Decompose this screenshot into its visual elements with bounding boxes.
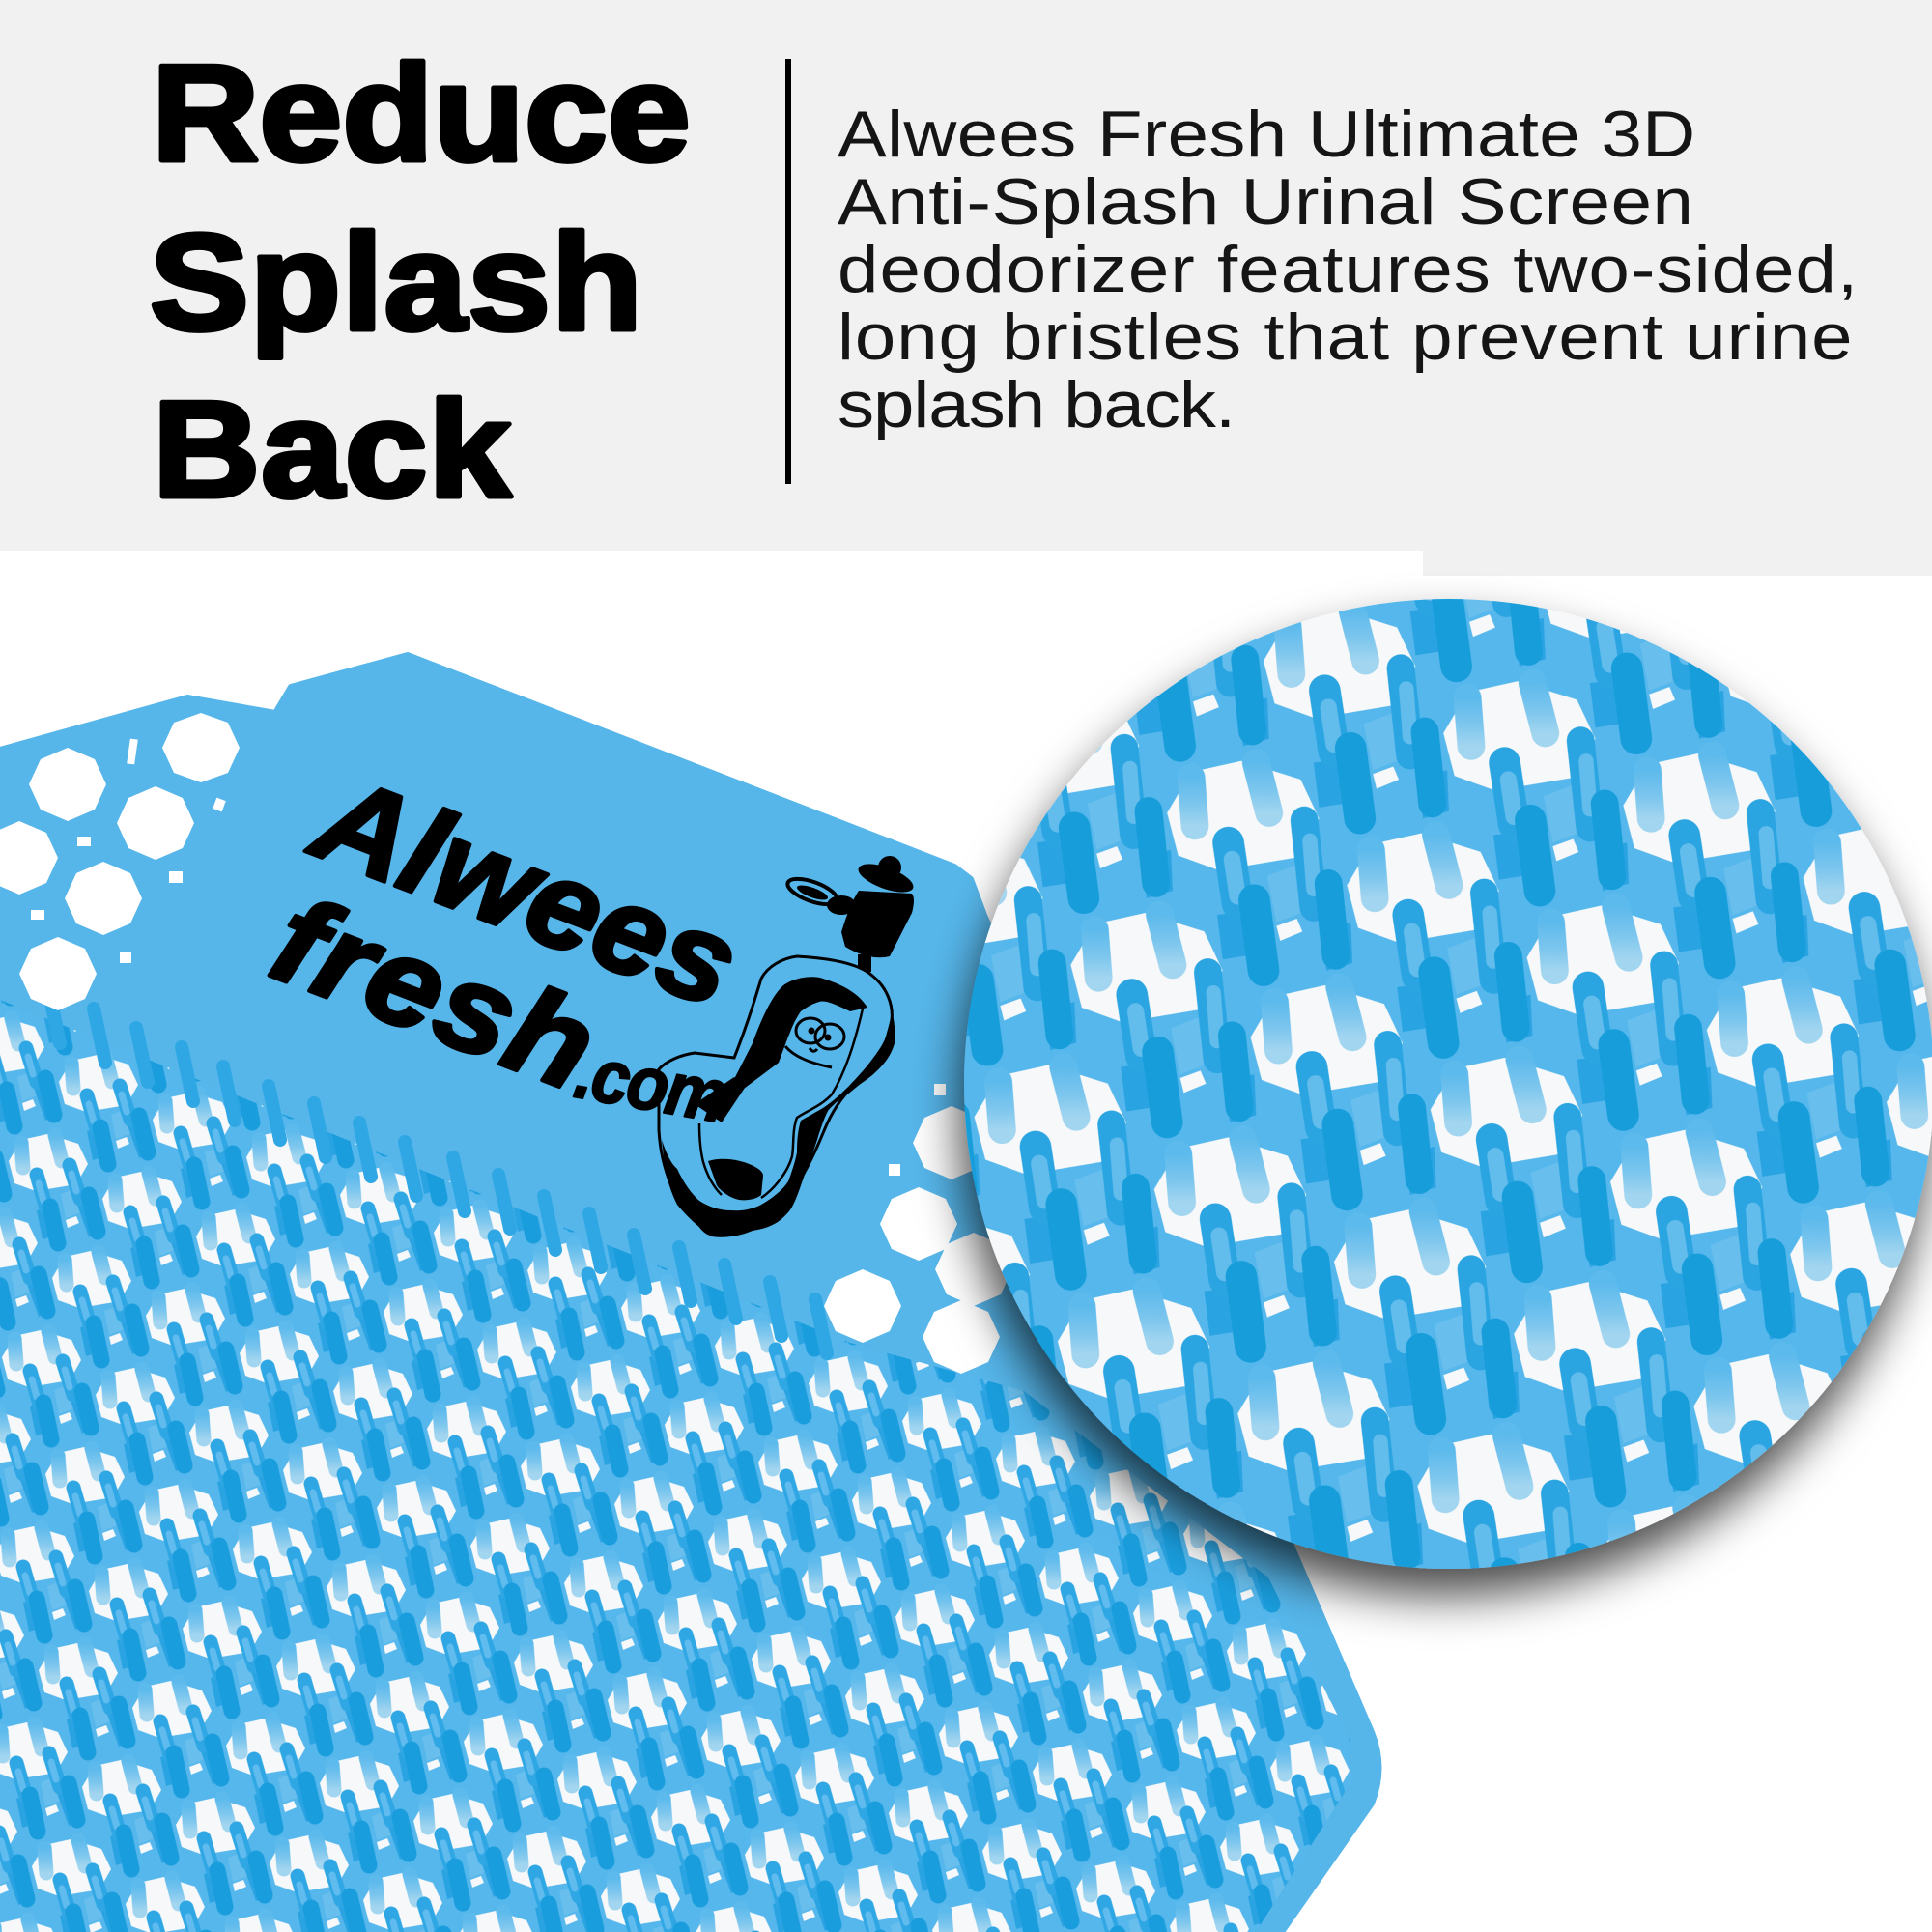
black pool <box>708 1159 763 1200</box>
honeycomb holes right side <box>824 1084 1012 1374</box>
title: Reduce Splash Back <box>150 38 691 526</box>
description text: splash back. <box>838 369 1236 441</box>
face <box>785 1018 844 1067</box>
logo wordmark: Alwees <box>295 746 756 1034</box>
description text <box>838 99 1858 441</box>
flush pipe <box>841 856 917 972</box>
inner lines <box>699 1005 864 1198</box>
description text: Anti-Splash Urinal Screen <box>838 166 1693 239</box>
flush valve handle <box>784 873 856 915</box>
description text: deodorizer features two-sided, <box>838 234 1858 306</box>
black crescent <box>662 1011 895 1237</box>
bristle lattice area <box>0 1000 1352 1932</box>
honeycomb holes upper left <box>0 713 240 1010</box>
bristle tips along solid edge <box>48 989 827 1353</box>
description text: Alwees Fresh Ultimate 3D <box>838 99 1695 171</box>
magnified circle: bristle close-up <box>964 599 1932 1569</box>
black inner top and left stripe <box>734 977 867 1089</box>
title: Reduce Splash Back: Back <box>153 374 512 526</box>
product: urinal screen <box>0 655 1379 1932</box>
logo wordmark: fresh <box>255 869 613 1118</box>
title: Reduce Splash Back: Reduce <box>152 38 691 190</box>
screen silhouette <box>0 655 1379 1932</box>
description text: long bristles that prevent urine <box>838 301 1853 374</box>
logo mascot: urinal character <box>659 856 917 1237</box>
header background panel <box>0 0 1932 576</box>
title: Reduce Splash Back: Splash <box>150 207 642 359</box>
logo wordmark: .com <box>569 1030 733 1139</box>
hand <box>695 1077 747 1122</box>
logo wordmark <box>255 746 756 1139</box>
vertical divider <box>785 59 791 484</box>
urinal body outline <box>659 956 892 1235</box>
